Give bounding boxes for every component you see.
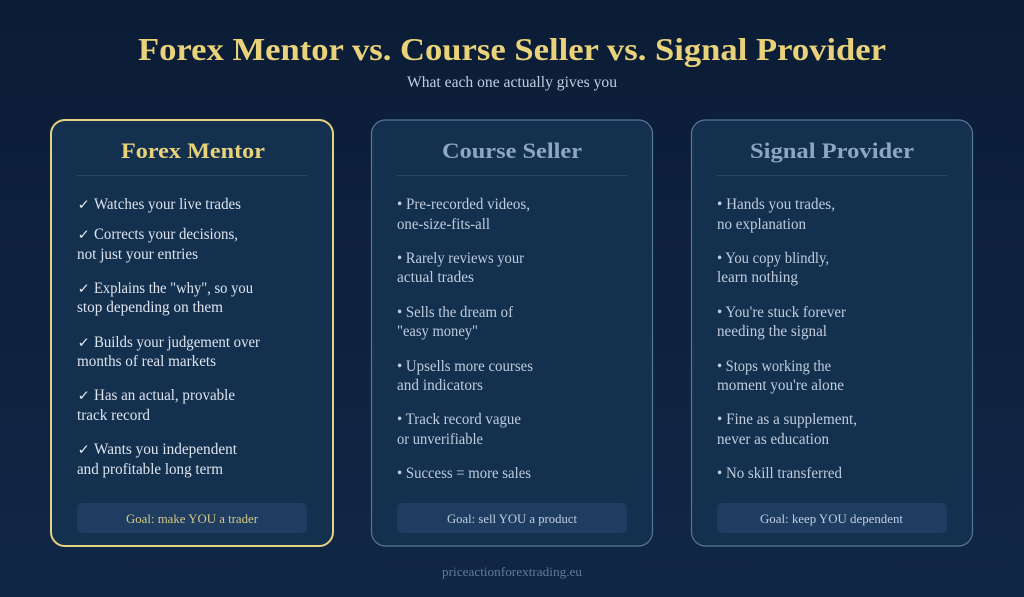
- list: signal provider traits: [717, 196, 857, 482]
- list: signal provider traits: • You're stuck forever: [717, 304, 846, 321]
- list: mentor benefits: Has an actual, provable: [94, 387, 235, 404]
- list: signal provider traits: moment you're alone: [717, 377, 844, 394]
- list: course seller traits: [397, 196, 533, 482]
- heading: forex mentor: Forex Mentor: [121, 138, 265, 163]
- goal box: signal provider: [717, 503, 947, 533]
- list: course seller traits: • Sells the dream of: [397, 304, 514, 321]
- list: course seller traits: "easy money": [397, 323, 478, 340]
- title: Forex Mentor vs. Course Seller vs. Signal Provider: [138, 31, 886, 67]
- goal box: mentor: Goal: make YOU a trader: [126, 512, 259, 526]
- list: mentor benefits: ✓: [78, 388, 90, 404]
- goal box: course seller: Goal: sell YOU a product: [447, 512, 577, 526]
- list: course seller traits: • Rarely reviews your: [397, 250, 524, 267]
- list: signal provider traits: no explanation: [717, 216, 806, 233]
- list: mentor benefits: and profitable long term: [77, 461, 223, 478]
- list: mentor benefits: track record: [77, 407, 150, 424]
- list: mentor benefits: Builds your judgement over: [94, 334, 260, 351]
- list: signal provider traits: • You copy blindly,: [717, 250, 829, 267]
- list: mentor benefits: stop depending on them: [77, 299, 223, 316]
- list: mentor benefits: ✓: [78, 442, 90, 458]
- list: mentor benefits: ✓: [78, 281, 90, 297]
- list: signal provider traits: never as education: [717, 431, 829, 448]
- list: course seller traits: • Pre-recorded videos,: [397, 196, 530, 213]
- list: signal provider traits: needing the signal: [717, 323, 827, 340]
- list: mentor benefits: Corrects your decisions,: [94, 226, 238, 243]
- list: mentor benefits: ✓: [78, 197, 90, 213]
- heading: signal provider: Signal Provider: [750, 138, 914, 163]
- list: mentor benefits: not just your entries: [77, 246, 198, 263]
- panel: signal provider: [692, 120, 972, 546]
- list: signal provider traits: learn nothing: [717, 269, 798, 286]
- list: course seller traits: or unverifiable: [397, 431, 483, 448]
- list: mentor benefits: Explains the "why", so you: [94, 280, 253, 297]
- list: course seller traits: • Success = more sales: [397, 465, 531, 482]
- list: signal provider traits: • Fine as a supplement,: [717, 411, 857, 428]
- goal box: course seller: [397, 503, 627, 533]
- list: mentor benefits: months of real markets: [77, 353, 216, 370]
- list: signal provider traits: • No skill transferred: [717, 465, 842, 482]
- list: course seller traits: • Track record vague: [397, 411, 521, 428]
- list: course seller traits: and indicators: [397, 377, 483, 394]
- goal box: signal provider: Goal: keep YOU dependent: [760, 512, 903, 526]
- list: mentor benefits: Watches your live trades: [94, 196, 241, 213]
- goal box: mentor: [77, 503, 307, 533]
- list: course seller traits: one-size-fits-all: [397, 216, 490, 233]
- list: mentor benefits: ✓: [78, 335, 90, 351]
- list: mentor benefits: [77, 196, 260, 478]
- list: signal provider traits: • Stops working the: [717, 358, 831, 375]
- list: mentor benefits: ✓: [78, 227, 90, 243]
- subtitle: What each one actually gives you: [407, 74, 617, 91]
- list: course seller traits: actual trades: [397, 269, 474, 286]
- footer: website: priceactionforextrading.eu: [442, 565, 583, 579]
- heading: course seller: Course Seller: [442, 138, 582, 163]
- list: course seller traits: • Upsells more courses: [397, 358, 533, 375]
- list: signal provider traits: • Hands you trades,: [717, 196, 835, 213]
- panel: forex mentor: [51, 120, 333, 546]
- panel: course seller: [372, 120, 652, 546]
- list: mentor benefits: Wants you independent: [94, 441, 238, 458]
